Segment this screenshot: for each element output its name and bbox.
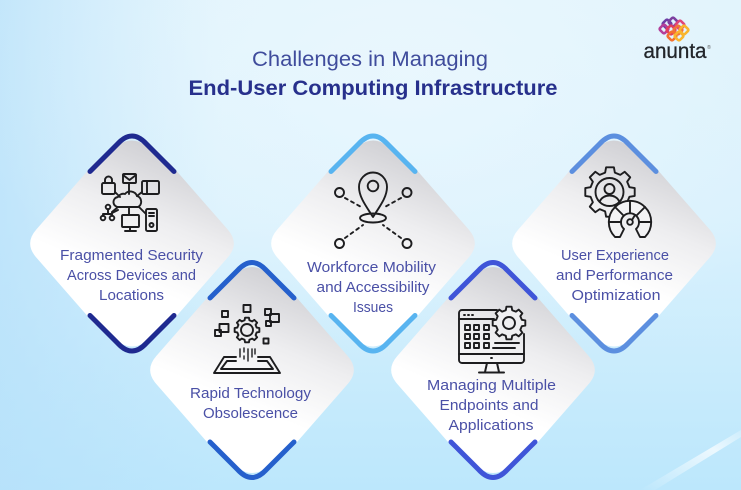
icon: gear user and gauge xyxy=(585,167,651,237)
bottom bracket xyxy=(90,316,174,351)
label: rapid technology: Rapid Technology xyxy=(190,385,311,402)
logo: anunta: ® xyxy=(707,44,711,51)
logo: anunta xyxy=(644,17,711,63)
diamond card xyxy=(391,267,595,473)
diamond card xyxy=(150,267,354,473)
top bracket xyxy=(90,136,174,172)
title: End-User Computing Infrastructure xyxy=(188,76,558,100)
label: managing endpoints xyxy=(427,377,556,434)
top bracket xyxy=(331,136,415,172)
label: managing endpoints: Applications xyxy=(448,417,534,434)
logo: anunta: anunta xyxy=(644,40,707,63)
bottom bracket xyxy=(572,316,656,351)
bottom bracket xyxy=(331,316,415,351)
panel: fragmented security xyxy=(30,136,234,351)
label: fragmented security: Across Devices and xyxy=(67,267,196,284)
label: workforce mobility: Issues xyxy=(353,299,393,316)
icon: monitor with gear xyxy=(459,307,525,372)
diamond card xyxy=(512,140,716,346)
label: managing endpoints: Endpoints and xyxy=(440,397,538,414)
top bracket xyxy=(210,262,294,298)
label: user experience: and Performance xyxy=(556,267,673,284)
label: workforce mobility: Workforce Mobility xyxy=(307,259,437,276)
label: workforce mobility xyxy=(307,259,437,316)
panel: rapid technology xyxy=(150,262,354,478)
label: user experience: User Experience xyxy=(561,247,669,264)
bottom bracket xyxy=(451,442,535,478)
panel: managing endpoints xyxy=(391,262,595,478)
label: fragmented security: Fragmented Security xyxy=(60,247,204,264)
bottom bracket xyxy=(210,442,294,478)
icon: gear and floating squares over tablet xyxy=(214,305,280,373)
icon: location pin with nodes xyxy=(335,172,412,248)
diamond card xyxy=(271,140,475,346)
label: user experience: Optimization xyxy=(572,287,660,304)
label: rapid technology: Obsolescence xyxy=(203,405,298,422)
label: user experience xyxy=(556,247,673,304)
diamond card xyxy=(30,140,234,346)
label: fragmented security: Locations xyxy=(99,287,164,304)
icon: connected devices cloud xyxy=(101,174,159,231)
label: rapid technology xyxy=(190,385,311,422)
top bracket xyxy=(451,262,535,298)
label: fragmented security xyxy=(60,247,204,304)
title: Challenges in Managing xyxy=(252,47,488,71)
panel: user experience xyxy=(512,136,716,351)
label: workforce mobility: and Accessibility xyxy=(316,279,430,296)
top bracket xyxy=(572,136,656,172)
label: managing endpoints: Managing Multiple xyxy=(427,377,556,394)
title xyxy=(188,47,558,100)
panel: workforce mobility xyxy=(271,136,475,351)
